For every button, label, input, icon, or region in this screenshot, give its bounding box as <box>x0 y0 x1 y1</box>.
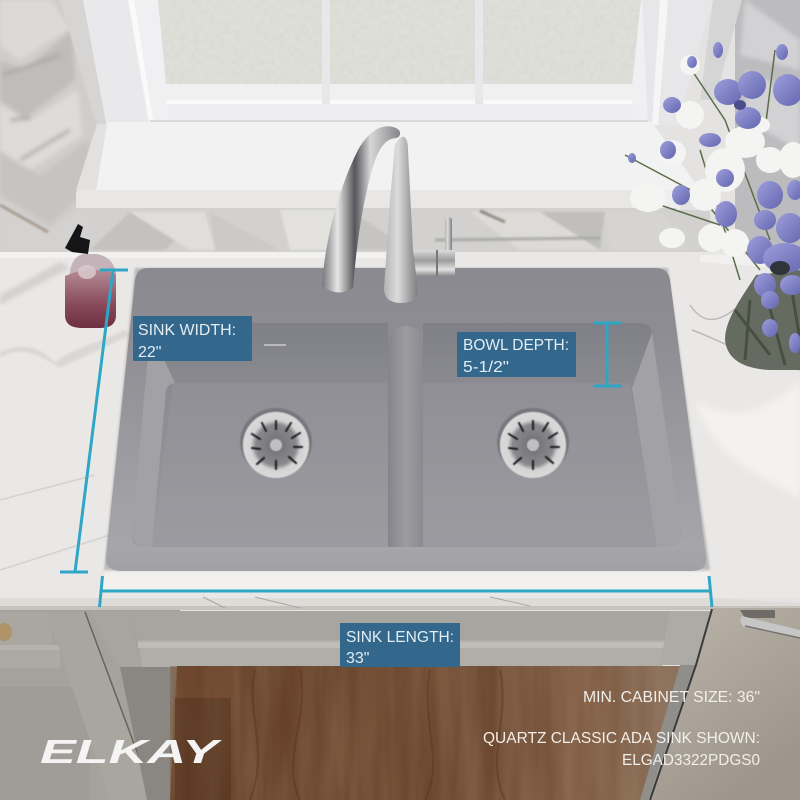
marble countertop <box>0 252 800 598</box>
dimension line: sink width <box>60 270 128 572</box>
window sill <box>76 122 700 212</box>
right cabinet door <box>640 608 800 800</box>
label: sink width: SINK WIDTH: <box>138 322 236 339</box>
wood floor <box>170 666 692 800</box>
caption: model shown: QUARTZ CLASSIC ADA SINK SHOWN: <box>483 730 760 747</box>
label: bowl depth: BOWL DEPTH: <box>463 337 569 354</box>
label: sink width: 22" <box>138 344 161 361</box>
faucet <box>322 126 455 303</box>
cabinet apron panel <box>129 611 713 667</box>
purple and white flowers <box>628 42 800 353</box>
faucet handle lever <box>413 217 455 276</box>
dimension line: bowl depth <box>593 323 622 386</box>
window glass with view <box>150 0 645 104</box>
cabinet opening shadow <box>120 667 177 800</box>
cabinet handle <box>740 610 800 638</box>
window casing, left <box>60 0 153 128</box>
faucet spout <box>322 126 400 293</box>
flower stems <box>625 50 775 280</box>
deck logo plate <box>264 344 286 346</box>
caption: model shown <box>483 730 760 769</box>
drain: right <box>497 408 569 478</box>
cabinet stiles, left <box>58 612 138 758</box>
sink <box>104 268 710 571</box>
dimension line: sink length <box>100 576 712 607</box>
left cabinet and drawer <box>0 610 180 800</box>
sink deck <box>106 268 706 571</box>
caption: model shown: ELGAD3322PDGS0 <box>622 752 760 769</box>
soap bottle <box>65 224 116 328</box>
marble chevron backsplash strip <box>90 210 710 252</box>
window frame <box>128 0 670 123</box>
icon: brass knob <box>0 623 12 641</box>
left bowl <box>132 323 388 547</box>
flower vase <box>725 270 800 370</box>
bowl divider <box>388 326 423 547</box>
faucet body <box>384 137 418 303</box>
right bowl <box>423 323 681 547</box>
label: sink length: SINK LENGTH: <box>346 629 454 646</box>
label: bowl depth <box>457 332 576 377</box>
marble chevron wall, left <box>0 0 96 252</box>
drain: left <box>240 408 312 478</box>
countertop front edge <box>0 596 800 610</box>
sink shadow <box>104 268 710 570</box>
label: bowl depth: 5-1/2" <box>463 359 509 376</box>
label: sink length <box>340 623 460 667</box>
logo: Elkay: ELKAY <box>40 733 223 770</box>
label: sink width <box>133 316 252 361</box>
marble wall, right <box>735 0 800 252</box>
label: sink length: 33" <box>346 650 369 667</box>
caption: minimum cabinet size: MIN. CABINET SIZE: 36" <box>583 689 760 706</box>
window casing, right <box>642 0 742 125</box>
